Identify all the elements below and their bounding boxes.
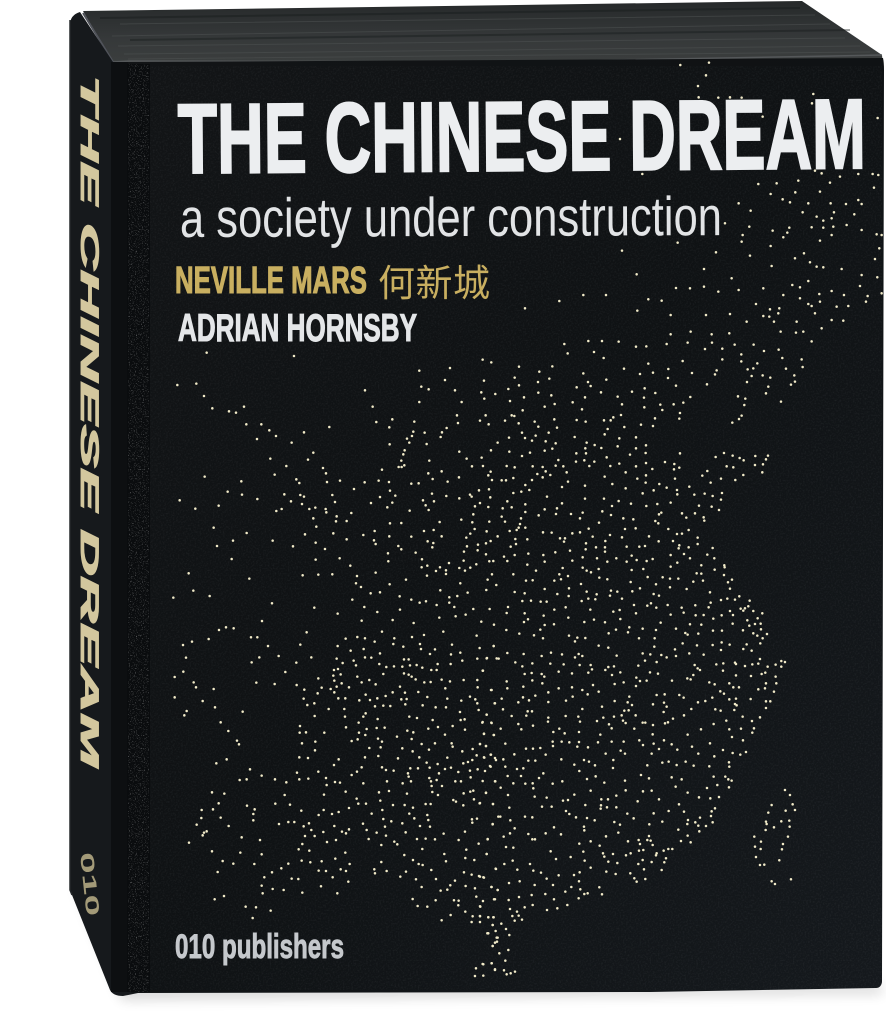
spine publisher mark: 010 <box>75 851 103 917</box>
spine hinge groove <box>127 64 150 992</box>
dotted map of China <box>173 63 882 976</box>
front cover <box>128 58 884 993</box>
soft shadow <box>72 880 882 1000</box>
book spine <box>70 12 138 996</box>
author: Neville Mars: 何新城 <box>378 263 490 304</box>
publisher: 010 publishers <box>175 928 344 966</box>
subtitle: a society under construction <box>180 185 722 249</box>
author: Neville Mars: NEVILLE MARS <box>175 260 367 302</box>
author: Adrian Hornsby: ADRIAN HORNSBY <box>178 307 417 350</box>
book top page edge <box>83 1 883 66</box>
spine title: THE CHINESE DREAM <box>75 75 103 770</box>
cover grain <box>128 66 882 990</box>
